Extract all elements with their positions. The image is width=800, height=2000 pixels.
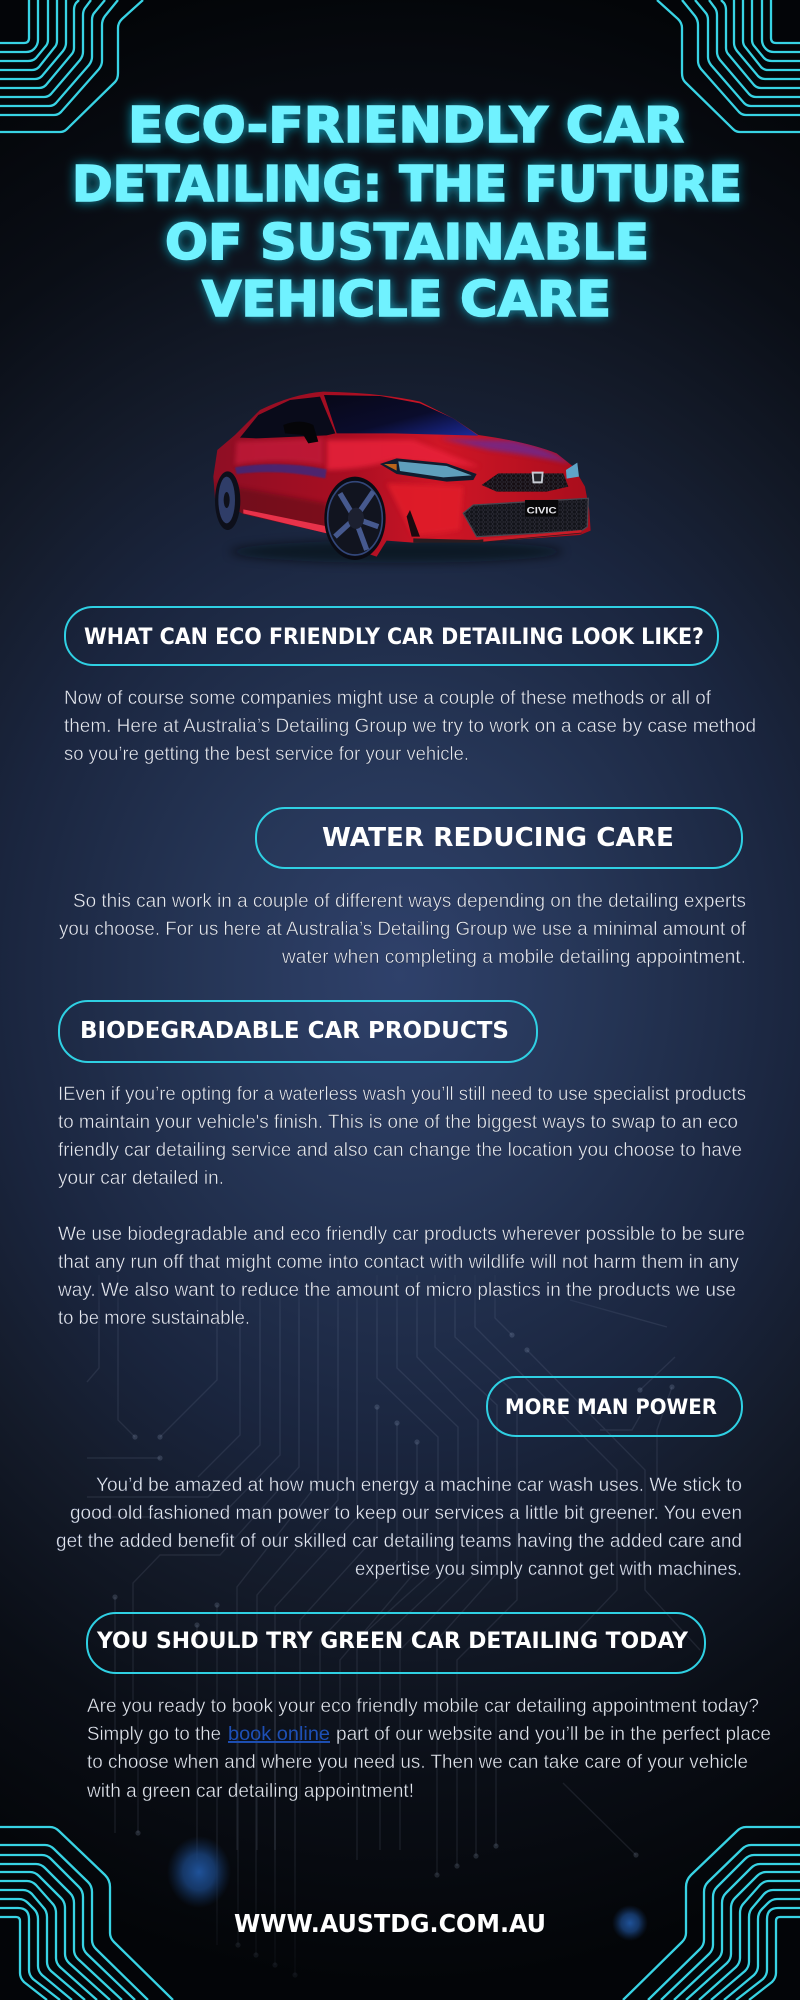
body text: so you’re getting the best service for your vehicle. [64,743,469,765]
heading pill [87,1613,705,1673]
windshield [324,395,478,436]
body text: part of our website and you’ll be in the perfect place [336,1723,771,1745]
body text: So this can work in a couple of different ways depending on the detailing experts [73,890,746,912]
body text: with a green car detailing appointment! [86,1780,414,1802]
body text: book online [228,1723,330,1745]
body text: water when completing a mobile detailing appointment. [281,946,746,968]
body text [59,890,747,968]
side vent [407,510,420,537]
panel: biodegradable car products [57,1001,746,1329]
body text: to choose when and where you need us. Then we can take care of your vehicle [87,1751,748,1773]
body text: Now of course some companies might use a couple of these methods or all of [64,687,712,709]
body text [57,1083,746,1329]
body text: Are you ready to book your eco friendly mobile car detailing appointment today? [87,1695,759,1717]
heading pill [256,808,742,868]
car shadow [230,540,563,563]
body text: Simply go to the [87,1723,221,1745]
body text: IEven if you’re opting for a waterless wash you’ll still need to use specialist products [58,1083,746,1105]
body text: that any run off that might come into contact with wildlife will not harm them in any [58,1251,739,1273]
title: DETAILING: THE FUTURE [72,156,742,213]
heading pill [487,1377,742,1436]
heading pill: YOU SHOULD TRY GREEN CAR DETAILING TODAY [96,1629,689,1654]
body text [56,1474,742,1580]
panel: more man power [56,1377,742,1580]
blue glow orbs [167,1836,648,1941]
body text: your car detailed in. [58,1167,224,1189]
right headlight [566,463,579,479]
panel: water reducing care [59,808,747,968]
badge [532,472,544,483]
icon: red car illustration [213,392,591,563]
body text: to be more sustainable. [58,1307,250,1329]
mirror [283,422,318,443]
heading pill: WHAT CAN ECO FRIENDLY CAR DETAILING LOOK LIKE? [84,625,704,650]
car body [213,392,591,557]
body text: get the added benefit of our skilled car detailing teams having the added care and [56,1530,742,1552]
body text: expertise you simply cannot get with machines. [355,1558,742,1580]
title [72,97,742,328]
heading pill [59,1001,537,1062]
title: VEHICLE CARE [202,271,611,328]
corner circuit lines: bottom left [0,1827,173,2000]
body text: way. We also want to reduce the amount of micro plastics in the products we use [57,1279,736,1301]
body text: You’d be amazed at how much energy a machine car wash uses. We stick to [96,1474,742,1496]
body text: them. Here at Australia’s Detailing Group we try to work on a case by case method [64,715,756,737]
heading pill: BIODEGRADABLE CAR PRODUCTS [80,1018,509,1044]
circuit board background pattern [87,1275,700,1978]
splitter [413,530,582,543]
heading pill [65,607,718,665]
front wheel [324,477,386,560]
corner circuit lines: bottom right [623,1827,800,2000]
body text [86,1695,771,1802]
body text [64,687,756,765]
heading pill: WATER REDUCING CARE [322,823,674,853]
panel: you should try green car detailing today [86,1613,771,1802]
headlight [380,458,477,482]
title: OF SUSTAINABLE [165,214,649,271]
heading pill: MORE MAN POWER [505,1395,717,1419]
body text: friendly car detailing service and also can change the location you choose to have [58,1139,742,1161]
lower grille [463,498,588,537]
body text: good old fashioned man power to keep our services a little bit greener. You even [70,1502,742,1524]
upper grille [482,473,568,492]
title: ECO-FRIENDLY CAR [128,97,684,154]
body text: to maintain your vehicle's finish. This is one of the biggest ways to swap to an eco [58,1111,738,1133]
side windows [240,397,335,438]
rear wheel [215,471,240,530]
body text: you choose. For us here at Australia’s Detailing Group we use a minimal amount of [59,918,747,940]
corner circuit lines: top left [0,0,143,132]
panel: what can eco friendly car detailing look like [64,607,756,765]
body text: We use biodegradable and eco friendly car products wherever possible to be sure [58,1223,745,1245]
icon: red car illustration: CIVIC [527,506,557,516]
corner circuit lines: top right [657,0,800,132]
plate [525,500,558,517]
website url: WWW.AUSTDG.COM.AU [234,1909,546,1938]
body reflections and shading [215,438,570,537]
